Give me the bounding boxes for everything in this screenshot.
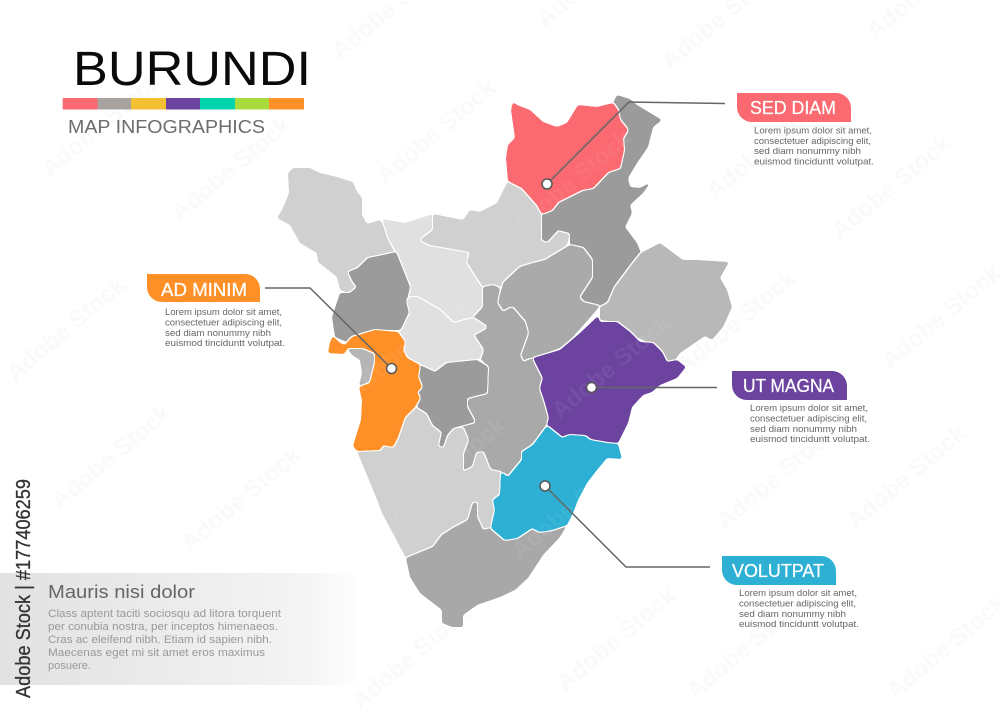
colour bar	[63, 98, 304, 110]
region: north centre light	[382, 214, 483, 323]
description: sed diam nonummy nibh	[754, 145, 861, 156]
description: Lorem ipsum dolor sit amet,	[750, 402, 868, 413]
region: UT MAGNA purple	[533, 316, 686, 443]
description: sed diam nonummy nibh	[739, 608, 846, 619]
region: south-west light	[357, 407, 501, 558]
region: centre right	[497, 245, 600, 362]
description: consectetuer adipiscing elit,	[739, 598, 856, 608]
panel text	[48, 608, 282, 672]
region: small coastal	[347, 348, 375, 386]
region: central long	[453, 285, 549, 477]
label text: VOLUTPAT	[732, 560, 824, 581]
text: Adobe Stock	[547, 309, 677, 425]
label tag	[737, 93, 851, 122]
label text: AD MINIM	[161, 279, 247, 300]
panel text: per conubia nostra, per inceptos himenaeos.	[48, 621, 278, 633]
text: Adobe Stock	[342, 289, 472, 405]
callout: VOLUTPAT	[540, 481, 859, 629]
text: Adobe Stock	[507, 124, 637, 240]
leader line	[265, 288, 391, 368]
text: Adobe Stock	[177, 441, 307, 557]
description: Lorem ipsum dolor sit amet,	[754, 124, 872, 136]
label text: SED DIAM	[750, 97, 836, 118]
leader line	[545, 486, 710, 567]
region: centre dark	[417, 360, 488, 447]
region: east	[600, 243, 732, 365]
text: Adobe Stock	[507, 449, 637, 565]
map of Burundi	[277, 95, 732, 627]
text: Adobe Stock	[47, 399, 177, 515]
panel text: Maecenas eget mi sit amet eros maximus	[48, 647, 265, 659]
region: northeast dark	[542, 95, 662, 306]
text: Adobe Stock	[702, 89, 832, 205]
title: BURUNDI	[73, 43, 311, 96]
callout: SED DIAM	[542, 93, 874, 189]
region: northwest	[277, 168, 395, 293]
region: north centre	[420, 181, 570, 288]
callout: UT MAGNA	[586, 371, 870, 444]
label tag	[732, 371, 847, 400]
description: euismod tinciduntt volutpat.	[739, 618, 859, 629]
subtitle: MAP INFOGRAPHICS	[68, 117, 265, 137]
callout: AD MINIM	[147, 274, 396, 374]
marker	[542, 179, 552, 189]
panel heading: Mauris nisi dolor	[48, 582, 195, 602]
panel text: Class aptent taciti sociosqu ad litora torquent	[48, 608, 282, 620]
text: Adobe Stock	[827, 129, 957, 245]
text: Adobe Stock	[682, 589, 812, 705]
stock credit: Adobe Stock | #177406259	[13, 479, 35, 698]
label tag	[147, 274, 260, 302]
label tag	[722, 556, 836, 585]
description: euismod tinciduntt volutpat.	[165, 337, 285, 348]
text: Adobe Stock	[267, 149, 397, 265]
text: Adobe Stock	[372, 74, 502, 190]
description: consectetuer adipiscing elit,	[165, 316, 282, 328]
description: euismod tinciduntt volutpat.	[750, 433, 870, 444]
description: sed diam nonummy nibh	[165, 327, 271, 338]
text: Adobe Stock	[2, 271, 132, 387]
text: Adobe Stock	[712, 419, 842, 535]
region: VOLUTPAT blue	[491, 426, 622, 540]
marker	[586, 382, 596, 392]
text: Adobe Stock	[372, 74, 502, 190]
region: south	[406, 502, 567, 627]
panel: Mauris nisi dolor	[0, 573, 355, 685]
description	[750, 402, 870, 444]
text: Adobe Stock	[842, 419, 972, 535]
description	[165, 306, 285, 348]
text: Adobe Stock	[382, 411, 512, 527]
description: consectetuer adipiscing elit,	[754, 135, 871, 146]
region: central light	[398, 297, 487, 372]
region: SED DIAM red	[506, 102, 628, 214]
marker	[386, 364, 396, 374]
leader line	[592, 386, 717, 388]
description: sed diam nonummy nibh	[750, 423, 857, 434]
text: Adobe Stock	[167, 111, 297, 227]
leader line	[547, 102, 725, 184]
panel text: posuere.	[48, 660, 91, 672]
description: consectetuer adipiscing elit,	[750, 412, 867, 424]
region: west dark	[332, 252, 410, 342]
description	[754, 124, 874, 166]
text: Adobe Stock	[552, 581, 682, 697]
description	[739, 587, 859, 629]
text: Adobe Stock	[347, 599, 477, 714]
marker	[540, 481, 550, 491]
description: Lorem ipsum dolor sit amet,	[739, 587, 857, 598]
region: AD MINIM orange	[328, 330, 422, 451]
text: Adobe Stock	[672, 264, 802, 380]
label text: UT MAGNA	[743, 375, 835, 396]
panel text: Cras ac eleifend nibh. Etiam id sapien nibh.	[48, 634, 272, 646]
text: Adobe Stock	[37, 67, 167, 183]
description: Lorem ipsum dolor sit amet,	[165, 306, 282, 317]
description: euismod tinciduntt volutpat.	[754, 156, 874, 166]
